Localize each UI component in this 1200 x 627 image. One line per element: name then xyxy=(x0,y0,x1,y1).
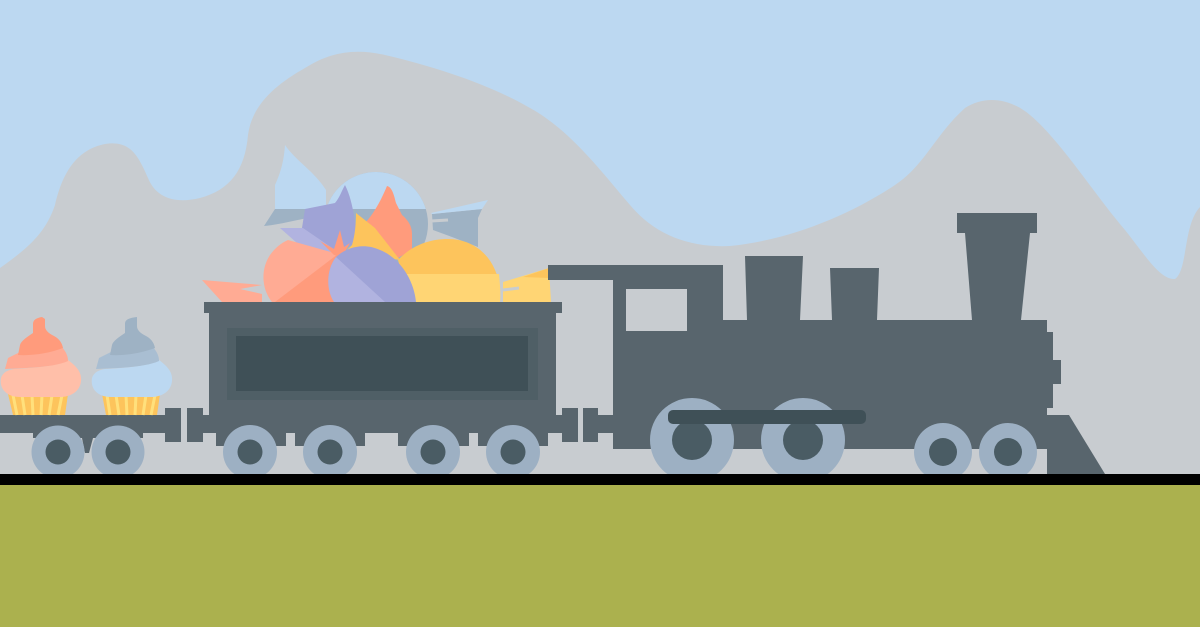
candy: purple front xyxy=(328,246,416,302)
tender inner panel xyxy=(227,328,538,400)
connecting rod xyxy=(668,410,866,424)
tender wheels xyxy=(223,425,540,479)
sky xyxy=(0,0,1200,480)
cupcake: blue xyxy=(92,317,172,415)
candy: orange top xyxy=(366,186,412,258)
train xyxy=(0,213,1105,482)
candy: yellow centre xyxy=(345,213,400,260)
tender body and couplers xyxy=(187,302,578,446)
flat car deck xyxy=(0,408,181,453)
tender xyxy=(187,302,578,479)
locomotive body xyxy=(548,213,1105,474)
mountains xyxy=(0,52,1200,480)
locomotive small wheels xyxy=(914,423,1037,474)
ground xyxy=(0,485,1200,627)
locomotive large wheels xyxy=(650,398,845,482)
candy: pink left xyxy=(202,230,350,302)
flat car with cupcakes xyxy=(0,317,181,478)
candy: blue wrapped xyxy=(264,145,488,276)
cupcake: pink xyxy=(1,317,81,415)
candy: purple top xyxy=(280,185,357,256)
locomotive xyxy=(548,213,1105,482)
candy: yellow right xyxy=(398,239,551,302)
candy pile xyxy=(202,145,551,302)
rail xyxy=(0,474,1200,485)
flat car wheels xyxy=(32,426,144,478)
tender window xyxy=(236,336,528,391)
